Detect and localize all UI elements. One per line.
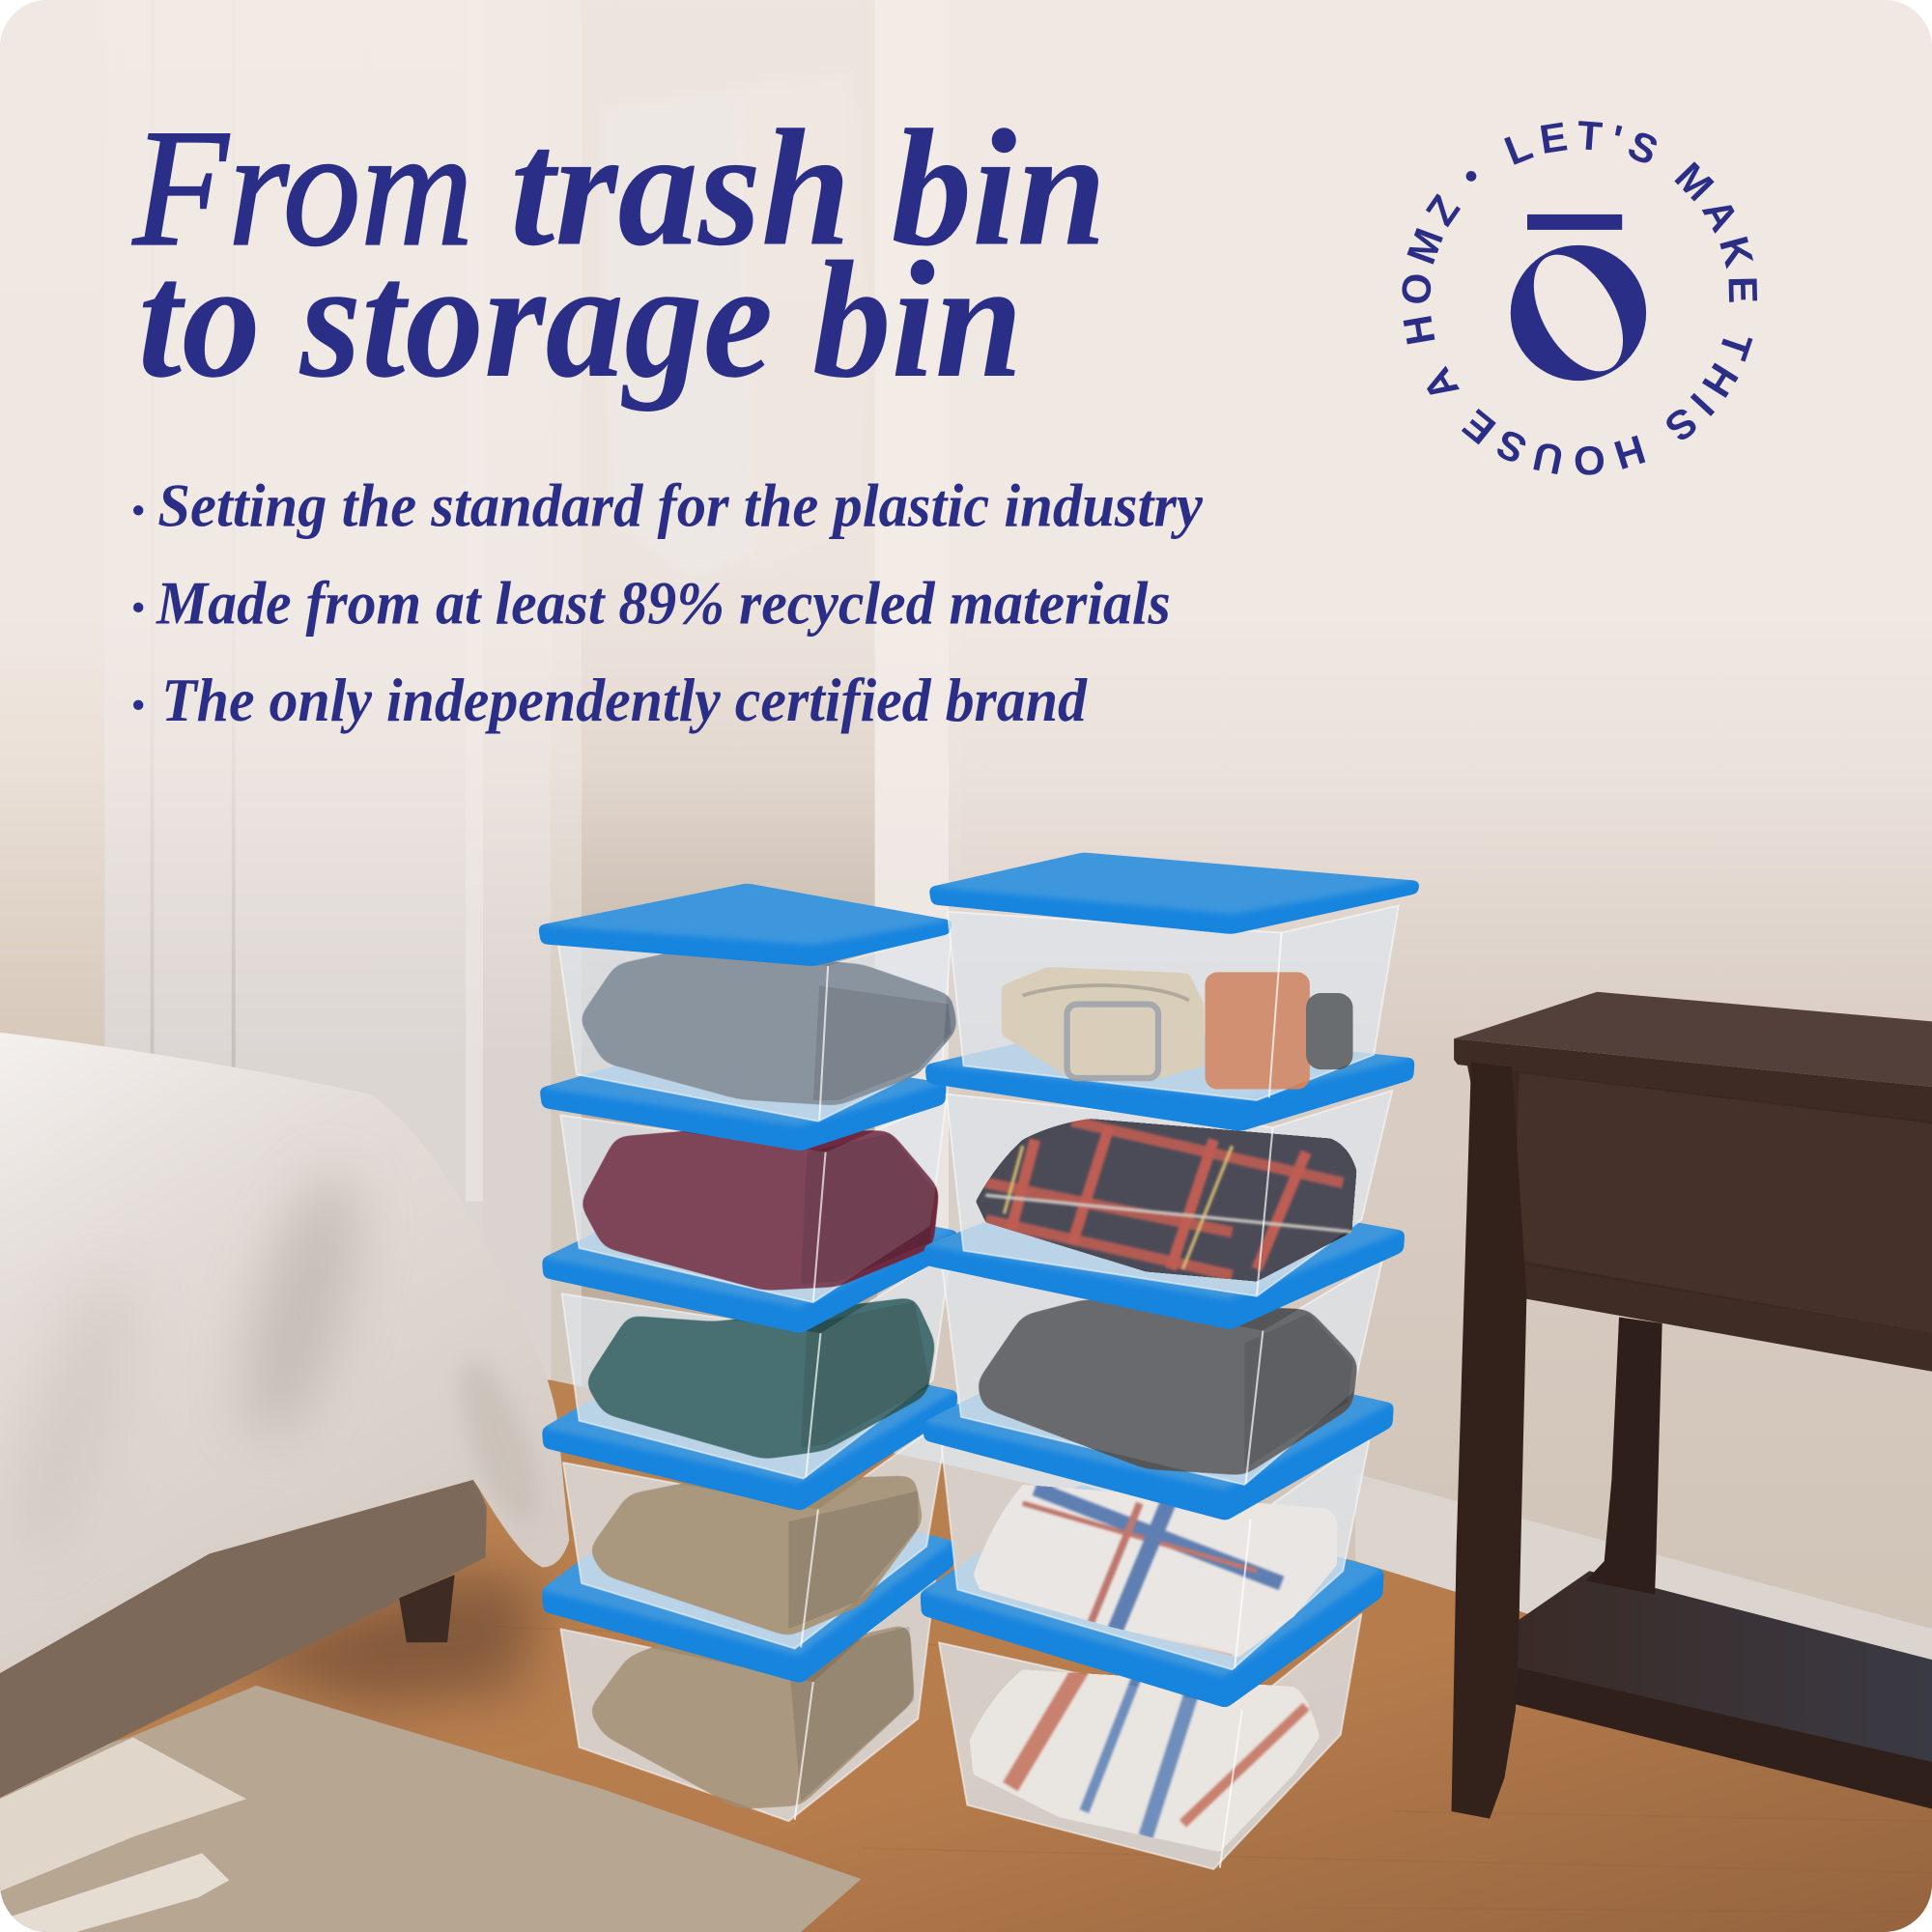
back leg xyxy=(1586,1318,1662,1595)
bullet list: • xyxy=(131,588,145,629)
logo mark xyxy=(1511,214,1646,386)
bullet list: The only independently certified brand xyxy=(161,666,1088,734)
folded cloth on rug xyxy=(0,1737,246,1932)
nightstand xyxy=(1452,992,1932,1819)
circular slogan: LET'S MAKE THIS HOUSE A HOMZ xyxy=(1402,121,1758,475)
logo badge xyxy=(1402,121,1758,475)
right bin 3 xyxy=(923,1221,1405,1486)
bed base xyxy=(0,1466,487,1798)
title: to storage bin xyxy=(138,226,1023,412)
right bin 5 xyxy=(922,1571,1382,1869)
hanging clothes in closet xyxy=(604,74,868,579)
drawer xyxy=(1513,1073,1932,1333)
left bin 2 xyxy=(541,1046,947,1302)
plaid towel xyxy=(974,1485,1337,1658)
right bin 2 xyxy=(926,1025,1413,1296)
belt xyxy=(1002,967,1204,1082)
right stack of bins xyxy=(922,854,1418,1869)
title xyxy=(132,95,1106,412)
rug xyxy=(0,1686,862,1932)
bullet list: • xyxy=(131,491,145,531)
left stack of bins xyxy=(540,885,957,1821)
baseboard xyxy=(1355,1476,1932,1660)
title: trash bin xyxy=(510,95,1106,281)
left bin 5 xyxy=(543,1543,953,1821)
striped towel xyxy=(970,1669,1320,1852)
left bin 1 xyxy=(540,885,957,1122)
lower shelf xyxy=(1498,1571,1932,1765)
right bin 4 xyxy=(920,1393,1393,1708)
wood floor xyxy=(0,1380,1932,1932)
bullet list: Setting the standard for the plastic industry xyxy=(157,471,1204,540)
dark roll xyxy=(1306,993,1353,1069)
bullet list: • xyxy=(131,685,145,725)
orange cylinder xyxy=(1205,972,1310,1090)
left bin 3 xyxy=(542,1227,956,1480)
left bin 4 xyxy=(542,1385,957,1683)
title: From xyxy=(132,95,473,281)
red plaid blanket xyxy=(967,1109,1368,1293)
lower rail xyxy=(1526,1298,1932,1372)
front leg xyxy=(1452,1062,1526,1819)
bed leg xyxy=(399,1575,455,1642)
right bin 1 xyxy=(930,854,1418,1100)
apron backing xyxy=(1466,1060,1932,1372)
bed xyxy=(0,1033,569,1798)
top fade overlay xyxy=(0,0,1932,1060)
bullet list: Made from at least 89% recycled materials xyxy=(156,568,1171,637)
table top xyxy=(1454,992,1932,1087)
bullet list xyxy=(131,471,1204,734)
duvet xyxy=(0,1033,569,1673)
